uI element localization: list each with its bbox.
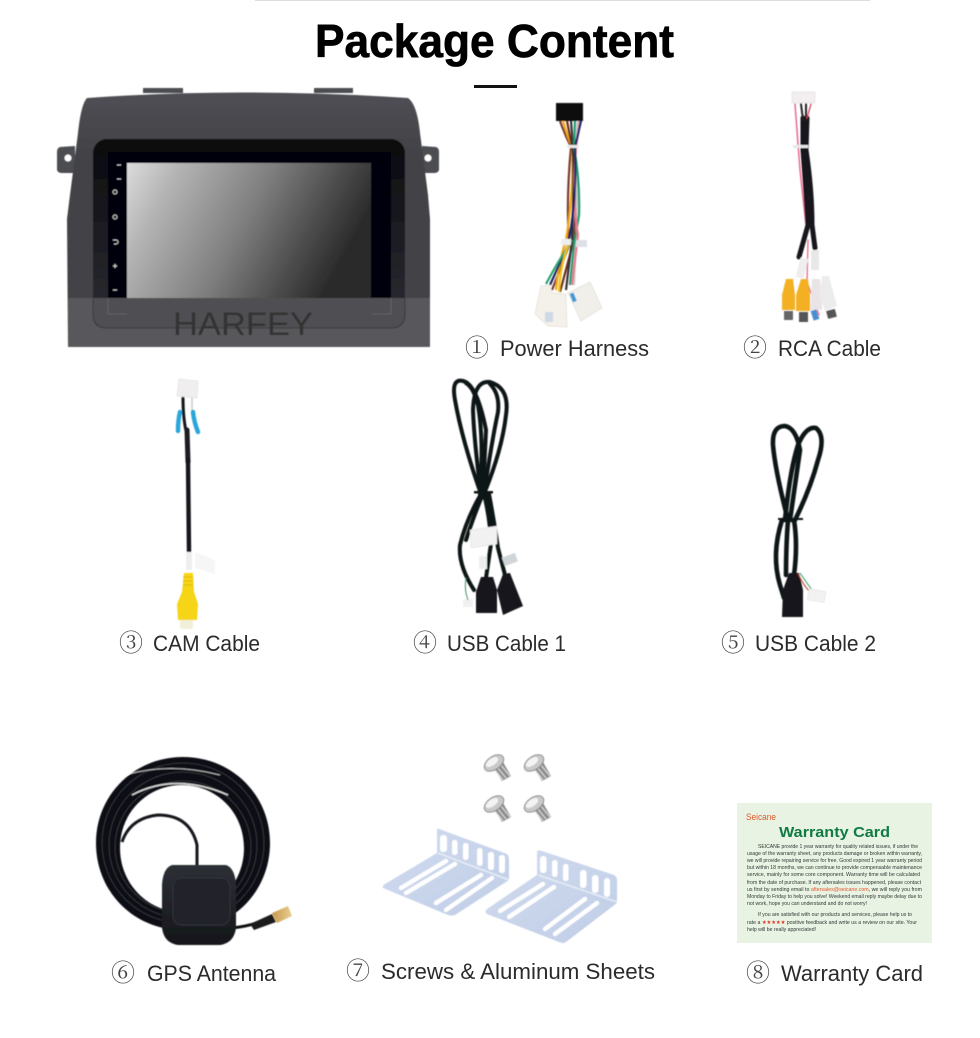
label: GPS antenna: ⑥	[111, 960, 135, 987]
card body text: help will be really appreciated!	[747, 927, 816, 933]
top connector	[792, 92, 815, 103]
card body text: usage of the warranty sheet, any products damage or broken within warranty,	[747, 851, 922, 857]
label: USB cable 1: USB Cable 1	[447, 631, 566, 656]
panel: warranty card	[737, 803, 932, 943]
mounting ears	[57, 88, 439, 173]
label: CAM cable	[119, 630, 260, 657]
bracket right	[486, 850, 617, 943]
panel: head unit	[57, 88, 439, 347]
cable loops	[773, 426, 822, 598]
connector	[177, 379, 198, 398]
lead to connector	[232, 921, 262, 928]
label: CAM cable: ③	[119, 630, 143, 657]
label: RCA cable	[743, 335, 881, 362]
antenna lead	[122, 815, 197, 865]
label: screws and aluminum sheets: Screws & Aluminum Sheets	[381, 959, 655, 984]
card body text: rate a ★★★★★ positive feedback and write us a review on our site. Your	[747, 920, 917, 926]
label: GPS antenna: GPS Antenna	[147, 961, 277, 986]
card body text: Monday to Friday to help you solve! Weekend email reply maybe delay due to	[747, 894, 922, 900]
panel: RCA cable	[782, 92, 837, 322]
title: Package Content	[315, 15, 674, 67]
card body text: not work, hope you can understand and do not worry!	[747, 901, 867, 907]
label: warranty card: Warranty Card	[781, 961, 923, 986]
label: USB cable 2: USB Cable 2	[755, 631, 876, 656]
cable labels	[470, 526, 497, 548]
screws	[481, 751, 551, 822]
cable coil	[96, 757, 270, 930]
antenna body	[162, 865, 236, 945]
bottom watermark band	[68, 298, 430, 347]
label: screws and aluminum sheets: ⑦	[346, 958, 370, 985]
RCA wires	[795, 104, 819, 315]
USB plug	[782, 573, 803, 617]
card body text: If you are satisfied with our products and services, please help us to	[758, 912, 912, 918]
label: CAM cable: CAM Cable	[153, 631, 260, 656]
label: USB cable 1: ④	[413, 630, 437, 657]
label: RCA cable: RCA Cable	[778, 336, 881, 361]
inner recess	[93, 139, 405, 328]
label: power harness: Power Harness	[500, 336, 649, 361]
label: USB cable 2: ⑤	[721, 630, 745, 657]
card body text: service, mainly for some core component. Warranty time will be calculated	[747, 872, 920, 878]
yellow RCA plug	[177, 573, 198, 620]
watermark: HARFEY	[173, 306, 313, 342]
panel: USB cable 1	[454, 381, 523, 615]
card body text: but within 18 months, we can continue to provide compensable maintenance	[747, 865, 922, 871]
panel: CAM cable	[177, 379, 215, 629]
cable loops	[454, 381, 507, 590]
panel: GPS antenna	[96, 757, 292, 945]
label: RCA cable: ②	[743, 335, 767, 362]
radio frame	[108, 152, 391, 315]
white plugs	[535, 285, 567, 327]
card body text: we will provide repairing service for free. Good expired 1 year warranty period	[746, 858, 922, 864]
gold connector	[272, 906, 292, 923]
bracket left	[383, 829, 509, 916]
panel: power harness	[535, 103, 602, 327]
panel: screws and brackets	[383, 751, 617, 943]
title underline	[474, 85, 517, 88]
screen	[127, 163, 371, 298]
card body text: from the date of purchase. If any aftersales issues happened, please contact	[747, 880, 921, 886]
small wires and connector	[798, 574, 810, 592]
panel: USB cable 2	[773, 426, 826, 617]
harness wires	[546, 121, 581, 292]
label: power harness: ①	[465, 335, 489, 362]
top connector	[556, 103, 583, 121]
card body text: SEICANE provide 1 year warranty for quality related issues, if under the	[758, 844, 918, 850]
card body text	[746, 844, 922, 933]
RCA plugs	[782, 279, 795, 310]
USB plugs	[476, 577, 497, 613]
brand: Seicane	[746, 812, 776, 823]
card heading: Warranty Card	[779, 824, 890, 841]
side buttons	[113, 165, 121, 290]
dash bezel body	[67, 92, 430, 347]
label: warranty card: ⑧	[746, 960, 770, 987]
label: USB cable 1	[413, 630, 566, 657]
label: USB cable 2	[721, 630, 876, 657]
CAM wires	[178, 398, 198, 552]
card body text: us first by sending email to aftersales@seicane.com, we will reply you from	[747, 887, 922, 893]
card background	[737, 803, 932, 943]
